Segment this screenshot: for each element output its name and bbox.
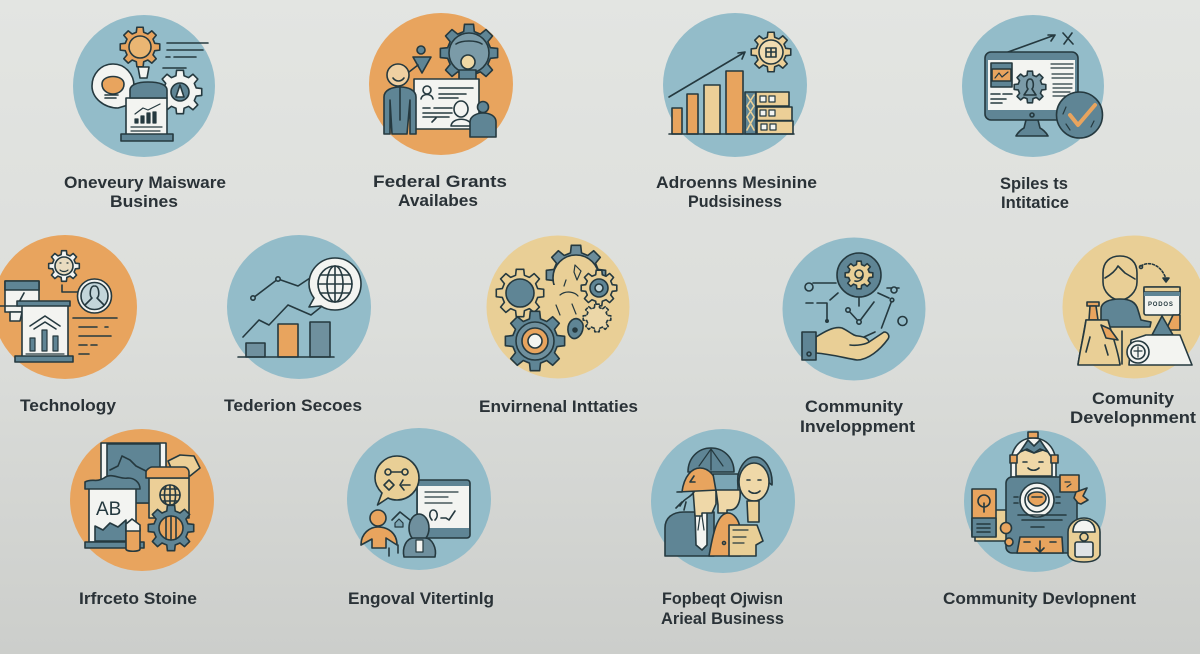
icon: person with bag and jar bbox=[1078, 256, 1192, 365]
panel: Spiles ts Intitatice bbox=[962, 15, 1104, 212]
icon: growth chart with globe bubble bbox=[238, 258, 361, 357]
panel: Community Devlopnent bbox=[943, 430, 1137, 608]
label: Community Devlopnent bbox=[943, 590, 1137, 608]
icon: gears, speech bubble and report bbox=[92, 27, 208, 141]
label: Envirnenal Inttaties bbox=[479, 398, 638, 416]
label bbox=[1000, 175, 1069, 212]
icon: drums, jar and gear: AB bbox=[96, 499, 121, 520]
badge circle bbox=[0, 235, 137, 379]
icon: drums, jar and gear bbox=[85, 443, 200, 551]
badge circle bbox=[663, 13, 807, 157]
icon: interlocking gears bbox=[496, 245, 617, 371]
label bbox=[656, 174, 817, 211]
label: Inveloppment bbox=[800, 418, 916, 436]
label: Federal Grants bbox=[373, 173, 507, 191]
panel: Tederion Secoes bbox=[224, 235, 371, 415]
panel: Federal Grants Availabes bbox=[369, 13, 513, 210]
label: Tederion Secoes bbox=[224, 397, 362, 415]
label: Oneveury Maisware bbox=[64, 174, 226, 192]
badge circle bbox=[1062, 236, 1200, 378]
icon: people, document and gear bbox=[384, 24, 498, 137]
icon: person with bag and jar: PODOS bbox=[1148, 302, 1174, 308]
icon: rising bar chart with gear and boxes bbox=[669, 32, 794, 134]
badge circle bbox=[964, 430, 1106, 572]
label: Community bbox=[805, 398, 904, 416]
icon: presentation board with profile badges bbox=[0, 251, 117, 362]
label: Comunity bbox=[1092, 390, 1175, 408]
label bbox=[800, 398, 916, 436]
label: Developnment bbox=[1070, 409, 1197, 427]
label: Technology bbox=[20, 397, 117, 415]
label: Intitatice bbox=[1001, 194, 1069, 212]
badge circle bbox=[227, 235, 371, 379]
badge circle bbox=[782, 238, 926, 380]
panel: Adroenns Mesinine Pudsisiness bbox=[656, 13, 817, 211]
label: Pudsisiness bbox=[688, 193, 782, 211]
badge circle bbox=[486, 236, 630, 378]
label: Engoval Vitertinlg bbox=[348, 590, 494, 608]
label: Busines bbox=[110, 193, 178, 211]
badge circle bbox=[962, 15, 1104, 157]
label: Arieal Business bbox=[661, 610, 784, 628]
label: Fopbeqt Ojwisn bbox=[662, 590, 783, 608]
panel: Community Inveloppment bbox=[782, 238, 926, 436]
badge circle bbox=[70, 429, 214, 571]
label bbox=[1070, 390, 1197, 427]
label: Spiles ts bbox=[1000, 175, 1068, 193]
label bbox=[64, 174, 226, 211]
badge circle bbox=[347, 428, 491, 570]
icon: people with bubble and monitor bbox=[361, 456, 470, 557]
label bbox=[373, 173, 507, 210]
badge circle bbox=[651, 429, 795, 573]
icon: monitor with check badge bbox=[985, 33, 1102, 138]
badge circle bbox=[369, 13, 513, 155]
label: Adroenns Mesinine bbox=[656, 174, 817, 192]
panel: Technology bbox=[0, 235, 137, 415]
icon: open hand holding network and gear bbox=[802, 253, 907, 360]
label: Availabes bbox=[398, 192, 478, 210]
icon: robot with card and backpack bbox=[972, 432, 1100, 562]
panel: Fopbeqt Ojwisn Arieal Business bbox=[651, 429, 795, 628]
icon: team in hard hats bbox=[665, 448, 772, 556]
panel: Comunity Developnment bbox=[1062, 236, 1200, 427]
label: Irfrceto Stoine bbox=[79, 590, 197, 608]
panel: Oneveury Maisware Busines bbox=[64, 15, 226, 211]
panel: Irfrceto Stoine bbox=[70, 429, 214, 608]
panel: Envirnenal Inttaties bbox=[479, 236, 638, 416]
badge circle bbox=[73, 15, 215, 157]
panel: Engoval Vitertinlg bbox=[347, 428, 494, 608]
label bbox=[661, 590, 784, 628]
